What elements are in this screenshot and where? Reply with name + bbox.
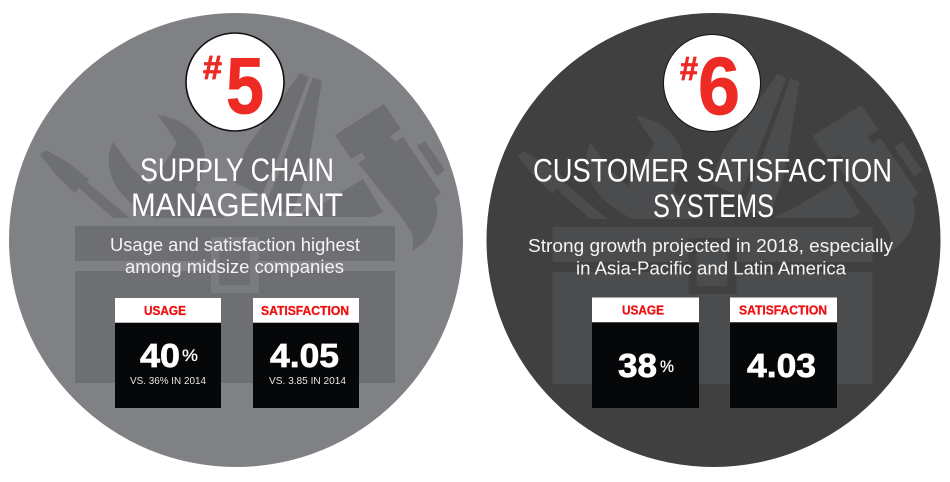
badge: #5: 5 <box>226 41 264 130</box>
heading: CUSTOMER SATISFACTION <box>533 152 892 188</box>
card: usage: USAGE <box>622 302 664 318</box>
heading: SUPPLY CHAIN <box>140 152 334 188</box>
badge: #6 <box>664 34 760 132</box>
panel: #6 customer satisfaction systems <box>486 13 940 467</box>
panel background circle <box>486 13 940 467</box>
icon: toolbox with tools <box>518 74 922 384</box>
heading <box>533 152 892 224</box>
subtitle text: Usage and satisfaction highest <box>110 235 360 255</box>
subtitle text: Strong growth projected in 2018, especially <box>528 236 893 256</box>
card: satisfaction: VS. 3.85 IN 2014 <box>269 375 346 387</box>
card: usage: 38 <box>618 347 657 384</box>
heading: MANAGEMENT <box>131 187 343 223</box>
card: satisfaction: 4.05 <box>270 337 339 374</box>
card: usage: USAGE <box>144 303 186 318</box>
card: satisfaction: SATISFACTION <box>261 303 349 318</box>
card: satisfaction <box>253 298 359 408</box>
subtitle text <box>110 235 360 277</box>
subtitle text: in Asia-Pacific and Latin America <box>576 258 847 278</box>
card: usage: % <box>182 346 198 365</box>
card: usage: % <box>660 357 674 376</box>
card: satisfaction: 4.03 <box>747 347 816 384</box>
card: usage <box>115 298 221 408</box>
card: usage: VS. 36% IN 2014 <box>130 375 206 387</box>
badge: #6: # <box>680 50 698 87</box>
card: satisfaction <box>730 298 837 408</box>
badge: #5 <box>186 33 284 131</box>
heading: SYSTEMS <box>653 188 774 224</box>
icon: toolbox with tools <box>40 73 445 383</box>
card: usage <box>592 298 699 408</box>
badge: #5: # <box>203 49 222 86</box>
panel: #5 supply chain management <box>9 13 463 467</box>
badge: #6: 6 <box>698 41 740 132</box>
card: usage: 40 <box>140 337 180 374</box>
subtitle text <box>528 236 893 278</box>
panel background circle <box>9 13 463 467</box>
heading <box>131 152 343 223</box>
subtitle text: among midsize companies <box>125 257 344 277</box>
card: satisfaction: SATISFACTION <box>739 302 827 318</box>
